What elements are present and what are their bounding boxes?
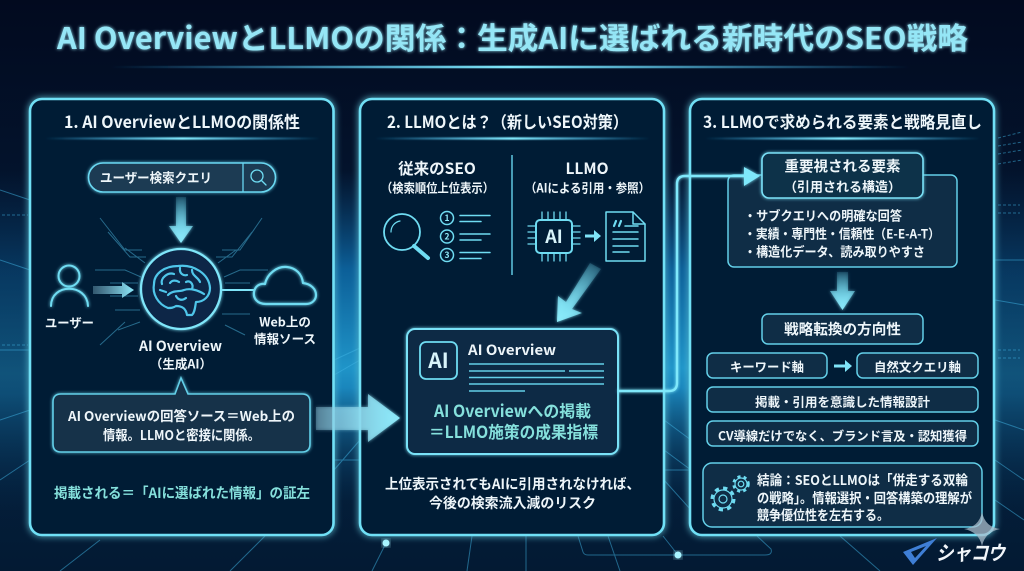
keyword axis box: キーワード軸 xyxy=(730,356,804,376)
search query label: ユーザー検索クエリ xyxy=(100,168,212,186)
logo mark xyxy=(903,538,937,565)
web sources label line 2: 情報ソース xyxy=(254,328,316,348)
requirement 1: ・サブクエリへの明確な回答 xyxy=(744,206,902,224)
keyword axis box xyxy=(707,353,827,378)
evidence note: 掲載される＝「AIに選ばれた情報」の証左 xyxy=(54,483,310,503)
card heading: AI Overview xyxy=(467,340,556,360)
arrow: keyword to natural query xyxy=(834,360,852,372)
icon: ranked list xyxy=(440,212,490,262)
panel 3 heading rule xyxy=(705,138,980,140)
information design box xyxy=(707,387,978,412)
icon: magnifier xyxy=(384,214,428,258)
requirements subheading: （引用される構造） xyxy=(784,176,901,196)
icon: AI badge: AI xyxy=(427,345,449,375)
risk note line 2: 今後の検索流入減のリスク xyxy=(429,493,596,513)
strategy heading box xyxy=(762,314,923,344)
conclusion box xyxy=(703,463,982,527)
panel 3 heading: 3. LLMOで求められる要素と戦略見直し xyxy=(703,109,982,133)
arrow: LLMO to AI Overview xyxy=(557,263,601,322)
text lines placeholder xyxy=(469,364,604,391)
AI circle with brain xyxy=(141,249,221,329)
user label: ユーザー xyxy=(45,312,94,332)
icon: brain xyxy=(154,266,210,315)
icon: ranked list: 2 xyxy=(444,230,450,242)
requirements heading box xyxy=(762,153,923,198)
arrow: big arrow panel 1 to card xyxy=(316,394,400,442)
requirement 2: ・実績・専門性・信頼性（E-E-A-T） xyxy=(744,224,940,242)
connector to cloud xyxy=(221,289,254,291)
conclusion line 3: 競争優位性を左右する。 xyxy=(757,504,889,524)
brand awareness box: CV導線だけでなく、ブランド言及・認知獲得 xyxy=(718,426,967,444)
callout line 1: AI Overviewの回答ソース＝Web上の xyxy=(67,405,295,425)
panel: 3 requirements xyxy=(690,99,994,535)
arrow: requirements to strategy xyxy=(830,272,855,310)
requirements heading box: 重要視される要素 xyxy=(784,156,901,176)
requirements list box xyxy=(728,175,957,267)
AI Overview card xyxy=(407,329,618,454)
panel 2 heading rule xyxy=(375,138,650,140)
title: AI OverviewとLLMOの関係：生成AIに選ばれる新時代のSEO戦略 xyxy=(56,14,968,58)
column: LLMO: LLMO xyxy=(565,157,609,179)
card statement line 1: AI Overviewへの掲載 xyxy=(433,398,591,422)
web sources label: Web上の xyxy=(259,312,311,330)
arrow: query to AI xyxy=(169,197,193,243)
AI overview label: AI Overview xyxy=(138,336,222,356)
column divider xyxy=(511,155,513,275)
requirement 3: ・構造化データ、読み取りやすさ xyxy=(744,242,925,260)
card statement line 2: ＝LLMO施策の成果指標 xyxy=(429,419,598,443)
icon: document quote xyxy=(606,212,645,261)
icon: user xyxy=(51,266,88,306)
conclusion line 2: の戦略」。情報選択・回答構築の理解が xyxy=(757,487,972,507)
icon: ranked list: 1 xyxy=(444,212,450,224)
callout xyxy=(53,378,310,452)
icon: ranked list: 3 xyxy=(444,249,450,261)
arrow: user to AI xyxy=(93,282,134,298)
title underline xyxy=(110,66,910,68)
panel 1 heading rule xyxy=(45,138,320,140)
arrow: chip to document xyxy=(585,230,601,242)
panel 2 heading: 2. LLMOとは？（新しいSEO対策） xyxy=(387,109,628,133)
column: conventional SEO: 従来のSEO xyxy=(398,157,476,179)
generative AI label: （生成AI） xyxy=(150,354,212,372)
SEO subtitle: （検索順位上位表示） xyxy=(381,178,494,196)
panel: 1 relationship xyxy=(30,99,334,535)
icon: AI chip: AI xyxy=(544,223,563,249)
column: LLMO xyxy=(525,157,650,261)
information design box: 掲載・引用を意識した情報設計 xyxy=(755,392,930,410)
icon: gears xyxy=(712,476,748,510)
strategy heading box: 戦略転換の方向性 xyxy=(784,318,901,340)
conclusion line 1: 結論：SEOとLLMOは「併走する双輪 xyxy=(757,469,968,489)
natural query box: 自然文クエリ軸 xyxy=(874,356,961,376)
icon: AI badge xyxy=(420,342,457,379)
callout line 2: 情報。LLMOと密接に関係。 xyxy=(103,424,260,444)
circuit lines xyxy=(95,218,268,345)
icon: cloud xyxy=(254,267,316,304)
search bar xyxy=(88,163,276,192)
icon: search xyxy=(251,170,266,185)
risk note line 1: 上位表示されてもAIに引用されなければ、 xyxy=(385,474,640,494)
panel: 2 what is LLMO xyxy=(360,99,664,535)
LLMO subtitle: （AIによる引用・参照） xyxy=(525,178,650,196)
column: conventional SEO xyxy=(381,157,494,262)
natural query box xyxy=(857,353,978,378)
panel 1 heading: 1. AI OverviewとLLMOの関係性 xyxy=(64,109,300,133)
arrow: card to panel 3 xyxy=(618,167,760,391)
logo xyxy=(903,512,1011,566)
logo text: シャコウ xyxy=(934,536,1011,566)
sparkle xyxy=(964,512,1000,546)
